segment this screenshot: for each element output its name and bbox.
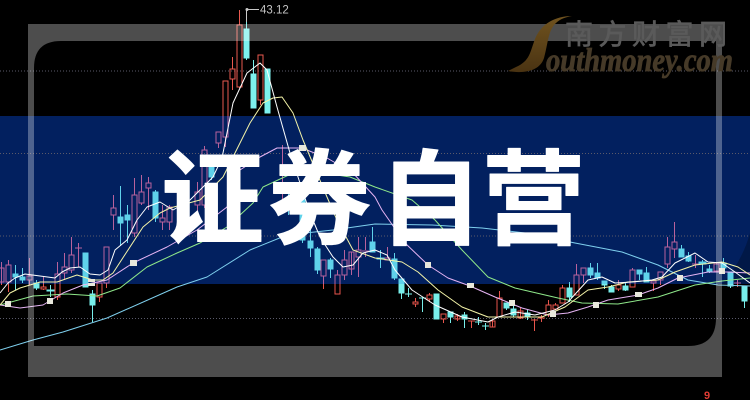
line: MA5 white — [0, 63, 750, 322]
title: 证券自营 — [161, 143, 585, 258]
line: MA30 green — [0, 172, 750, 305]
moving average markers — [5, 145, 725, 317]
navy title band — [0, 116, 750, 284]
icon: swoosh S — [508, 16, 572, 72]
watermark logo — [508, 16, 733, 79]
candlesticks: rising hollow red — [0, 10, 741, 331]
high price label: 43.12 — [260, 4, 289, 16]
watermark chinese name: 南方财富网 — [565, 19, 733, 50]
line: MA60 blue — [0, 224, 750, 350]
line: MA20 purple — [0, 148, 750, 315]
line: MA10 yellow — [0, 97, 750, 317]
candlesticks: falling filled cyan — [13, 9, 747, 330]
moving average lines — [0, 63, 750, 350]
high price label — [246, 4, 289, 22]
